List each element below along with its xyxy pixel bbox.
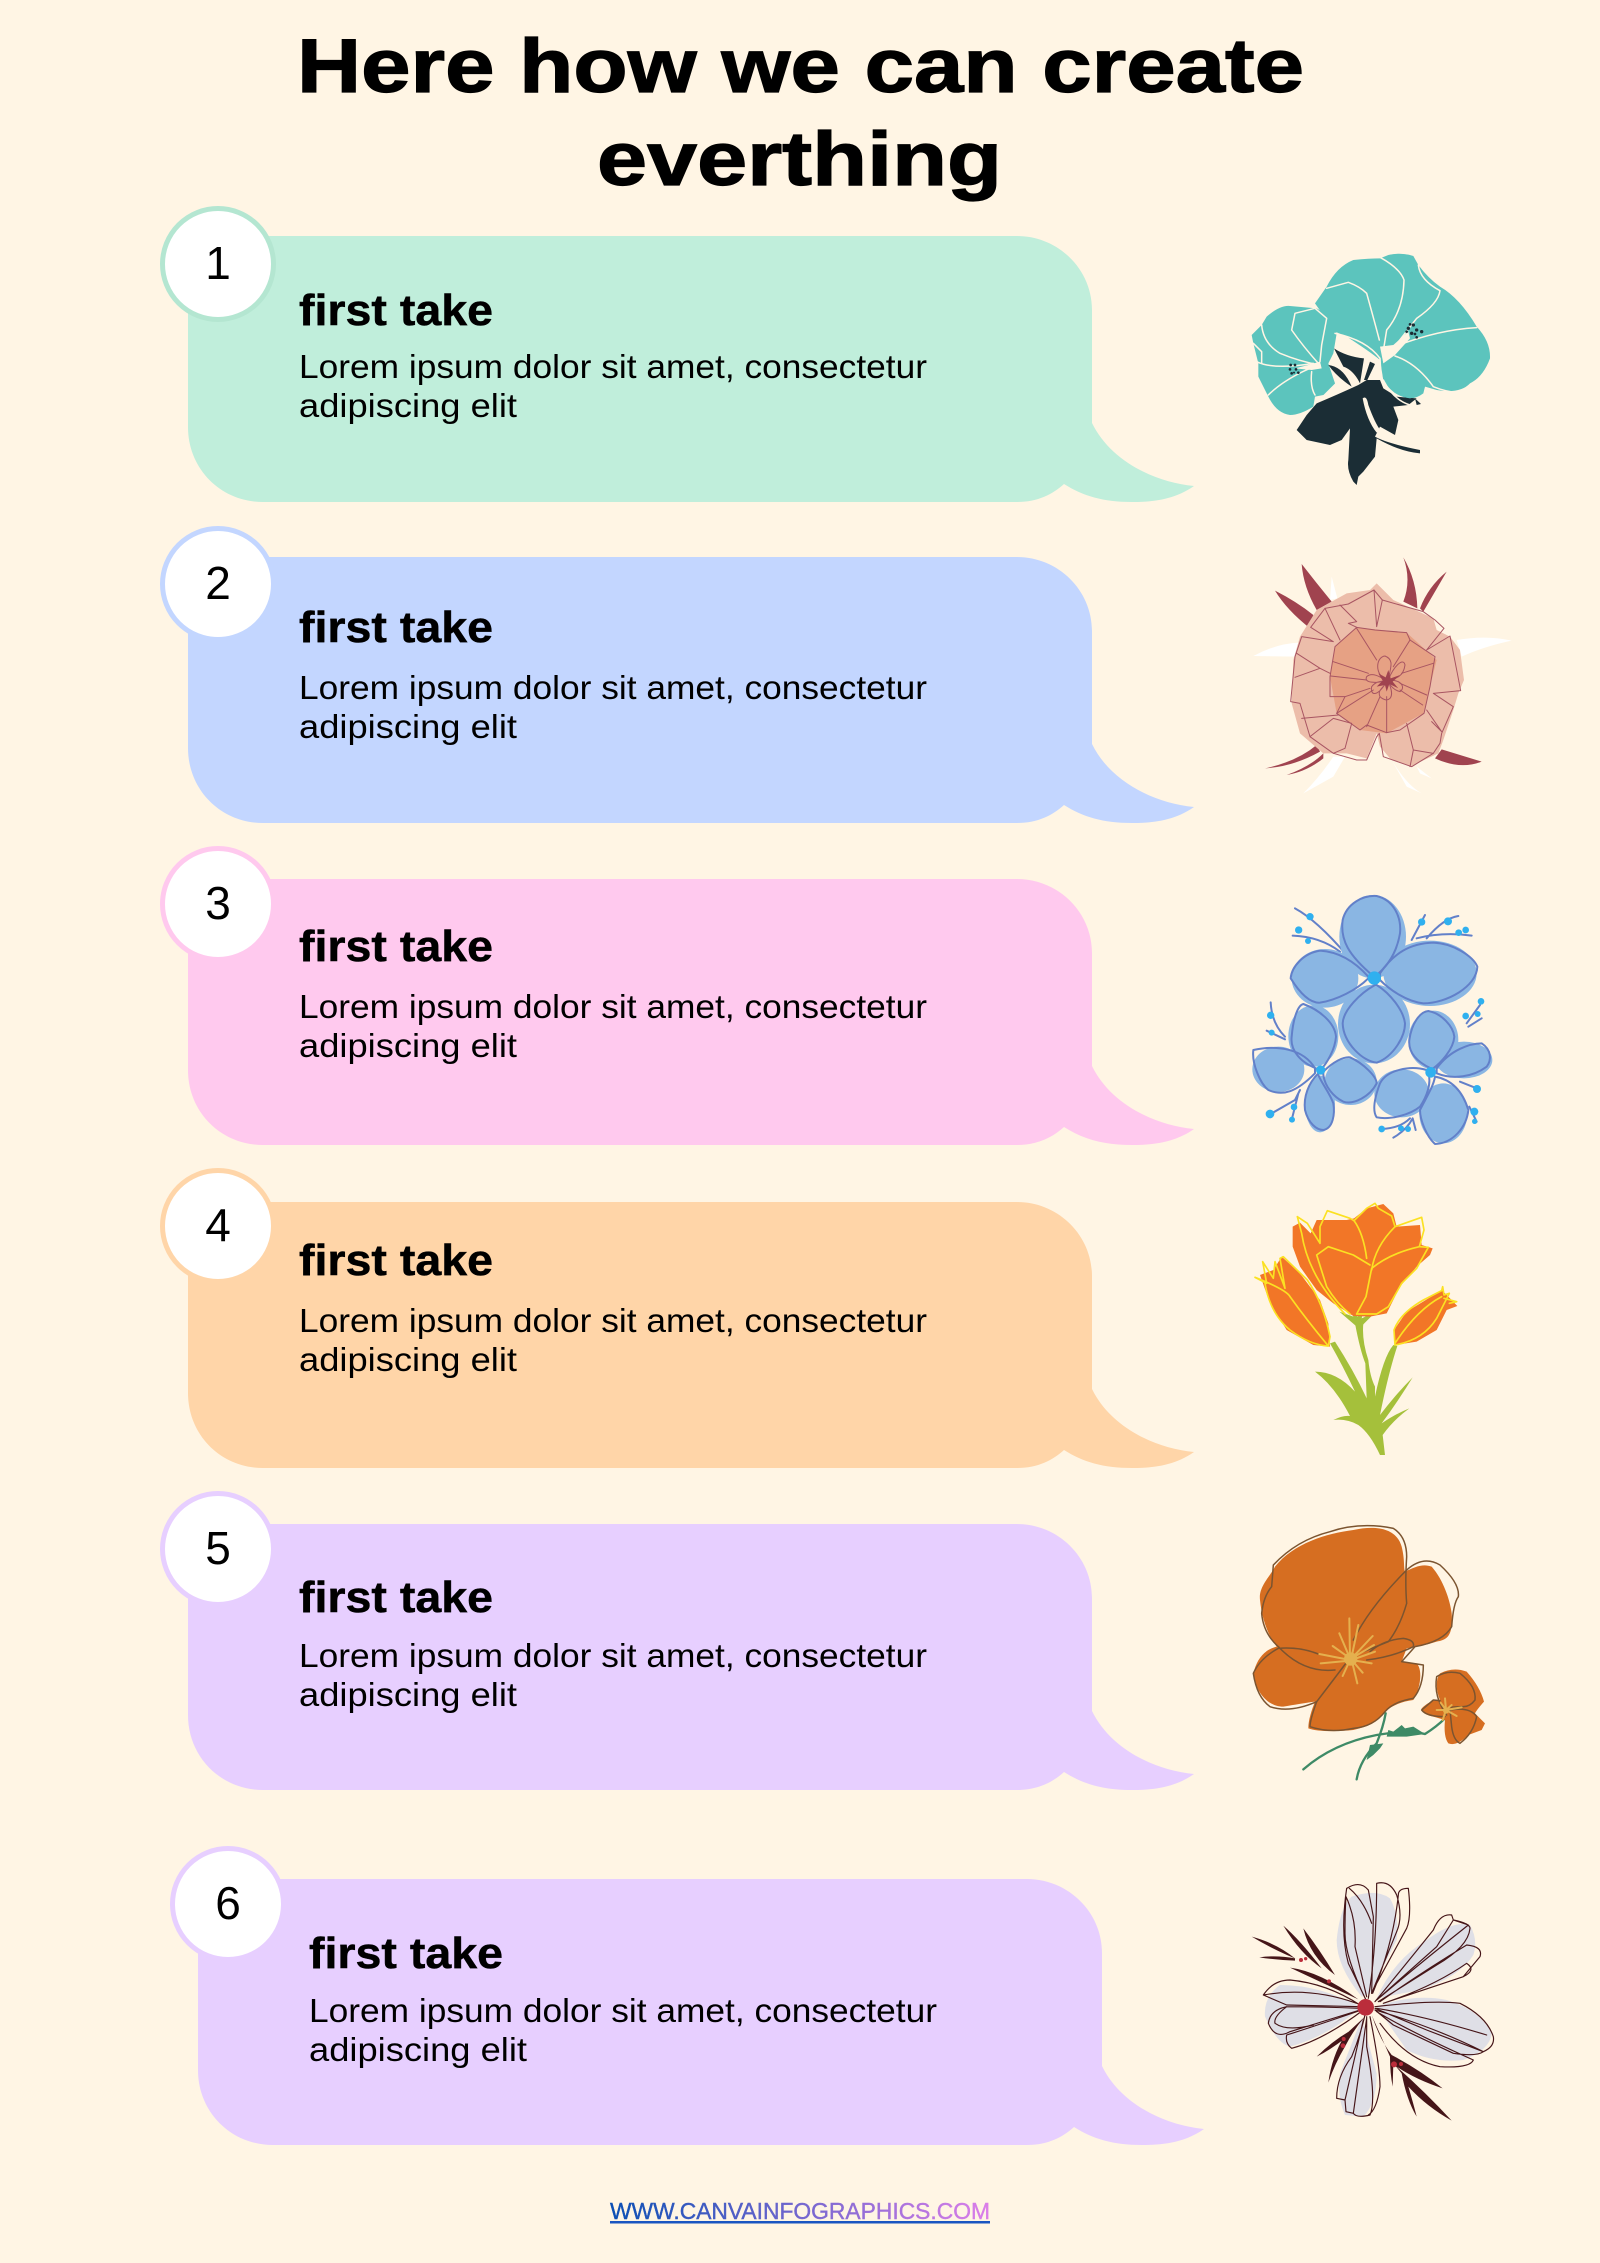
heading 2: first take: [299, 603, 493, 652]
footer link: WWW.CANVAINFOGRAPHICS.COM: [610, 2198, 990, 2224]
speech bubble 3: [188, 879, 1194, 1145]
panel: step 6: [172, 1848, 1204, 2145]
number badge 1: 1: [205, 237, 231, 289]
text block 2: adipiscing elit: [299, 708, 517, 745]
speech bubble 1: [188, 236, 1194, 502]
text block 6: Lorem ipsum dolor sit amet, consectetur: [309, 1992, 937, 2029]
icon: orange tulips: [1255, 1203, 1457, 1455]
number badge 2: [162, 528, 274, 640]
text block 1: adipiscing elit: [299, 387, 517, 424]
text block 6: [309, 1992, 937, 2068]
number badge 6: [172, 1848, 284, 1960]
number badge 2: 2: [205, 557, 231, 609]
number badge 3: [162, 848, 274, 960]
heading 6: first take: [309, 1929, 503, 1978]
number badge 3: 3: [205, 877, 231, 929]
heading 1: first take: [299, 286, 493, 335]
text block 4: [299, 1302, 927, 1378]
panel: step 5: [162, 1494, 1194, 1790]
speech bubble 2: [188, 557, 1194, 823]
icon: blue forget-me-not flowers: [1252, 895, 1492, 1144]
text block 5: Lorem ipsum dolor sit amet, consectetur: [299, 1637, 927, 1674]
number badge 6: 6: [215, 1877, 241, 1929]
speech bubble 4: [188, 1202, 1194, 1468]
number badge 5: 5: [205, 1522, 231, 1574]
text block 4: adipiscing elit: [299, 1341, 517, 1378]
title: Here how we can create: [297, 24, 1304, 109]
text block 4: Lorem ipsum dolor sit amet, consectetur: [299, 1302, 927, 1339]
number badge 5: [162, 1494, 274, 1604]
icon: grey line-art flower: [1252, 1883, 1494, 2121]
panel: step 2: [162, 528, 1194, 823]
text block 1: [299, 348, 927, 424]
number badge 1: [162, 208, 274, 320]
text block 1: Lorem ipsum dolor sit amet, consectetur: [299, 348, 927, 385]
text block 5: [299, 1637, 927, 1713]
icon: pink carnation flower: [1253, 557, 1512, 793]
text block 3: Lorem ipsum dolor sit amet, consectetur: [299, 988, 927, 1025]
icon: orange poppies: [1253, 1526, 1485, 1779]
icon: teal flower: [1252, 254, 1490, 485]
panel: step 4: [162, 1170, 1194, 1468]
text block 3: [299, 988, 927, 1064]
text block 2: [299, 669, 927, 745]
text block 2: Lorem ipsum dolor sit amet, consectetur: [299, 669, 927, 706]
number badge 4: [162, 1170, 274, 1282]
panel: step 3: [162, 848, 1194, 1145]
text block 6: adipiscing elit: [309, 2031, 527, 2068]
title: everthing: [597, 117, 1002, 202]
text block 3: adipiscing elit: [299, 1027, 517, 1064]
panel: step 1: [162, 208, 1194, 502]
heading 4: first take: [299, 1236, 493, 1285]
heading 3: first take: [299, 922, 493, 971]
speech bubble 5: [188, 1524, 1194, 1790]
title: [297, 24, 1304, 202]
number badge 4: 4: [205, 1199, 231, 1251]
speech bubble 6: [198, 1879, 1204, 2145]
heading 5: first take: [299, 1573, 493, 1622]
text block 5: adipiscing elit: [299, 1676, 517, 1713]
